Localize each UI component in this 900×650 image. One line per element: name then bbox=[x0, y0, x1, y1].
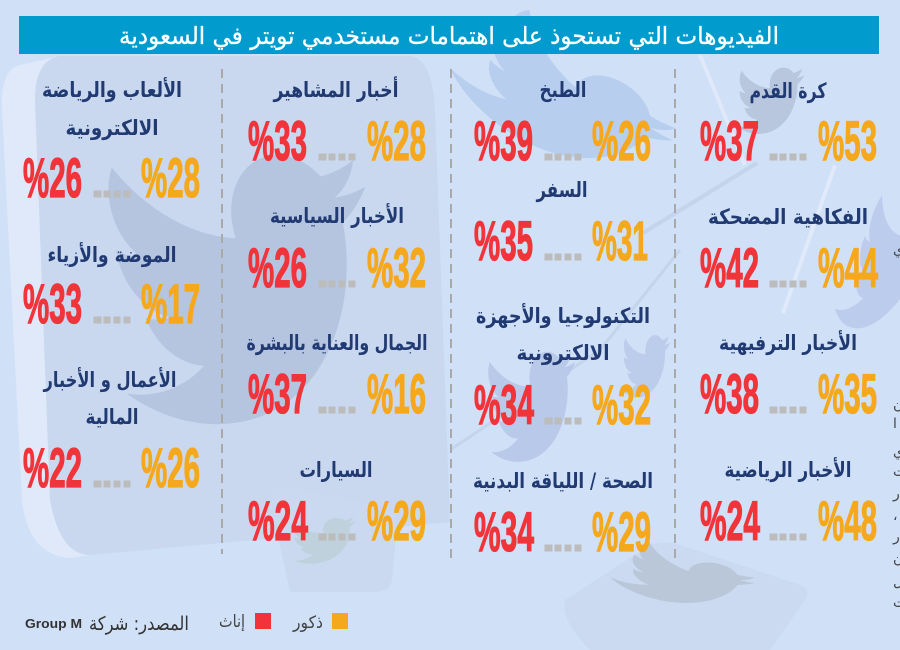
item: business and financial news: %26 bbox=[141, 436, 200, 499]
item: football bbox=[700, 79, 877, 172]
item: travel: %35 bbox=[474, 209, 533, 272]
item: fashion: %33 bbox=[23, 272, 82, 335]
item: business and financial news: الأعمال و الأخبار bbox=[43, 366, 176, 392]
item: cooking: %26 bbox=[592, 109, 651, 172]
title bar bbox=[19, 16, 879, 54]
item: celebrity news: أخبار المشاهير bbox=[273, 75, 398, 102]
item: health and fitness: %34 bbox=[474, 500, 534, 563]
item: games and esports: الألعاب والرياضة bbox=[42, 76, 182, 102]
item: cars: %24 bbox=[248, 489, 308, 552]
item: games and esports: الالكترونية bbox=[66, 116, 158, 140]
clipped neighbouring text at right edge: ر bbox=[892, 529, 900, 545]
item: beauty and skincare: %37 bbox=[248, 362, 307, 425]
item: business and financial news: المالية bbox=[86, 405, 138, 429]
item: cooking bbox=[474, 78, 651, 172]
item: cars: %29 bbox=[367, 489, 426, 552]
item: political news bbox=[248, 202, 426, 299]
item: comedy: %42 bbox=[700, 236, 759, 299]
item: games and esports: %26 bbox=[23, 146, 82, 209]
column dividers bbox=[222, 69, 675, 564]
item: celebrity news: %33 bbox=[248, 109, 307, 172]
item: comedy: الفكاهية المضحكة bbox=[708, 205, 868, 229]
item: political news: الأخبار السياسية bbox=[270, 202, 404, 228]
item: technology and electronics bbox=[474, 302, 651, 436]
item: sports news: الأخبار الرياضية bbox=[724, 456, 852, 482]
item: celebrity news: %28 bbox=[367, 109, 426, 172]
item: football: كرة القدم bbox=[750, 79, 827, 103]
source bbox=[25, 613, 189, 635]
item: fashion bbox=[23, 241, 200, 335]
item: travel bbox=[474, 178, 648, 272]
legend bbox=[219, 612, 348, 633]
item: technology and electronics: الالكترونية bbox=[516, 341, 610, 365]
item: fashion: الموضة والأزياء bbox=[48, 241, 176, 267]
item: health and fitness: %29 bbox=[592, 500, 651, 563]
item: cars: السيارات bbox=[300, 458, 372, 482]
item: political news: %32 bbox=[367, 236, 426, 299]
item: comedy bbox=[700, 205, 878, 299]
clipped neighbouring text at right edge: ا bbox=[893, 416, 897, 432]
source: المصدر: شركة bbox=[89, 613, 189, 635]
item: technology and electronics: التكنولوجيا والأجهزة bbox=[476, 302, 650, 328]
item: games and esports bbox=[23, 76, 200, 209]
item: beauty and skincare bbox=[246, 331, 428, 425]
item: cooking: الطبخ bbox=[540, 78, 586, 102]
item: entertainment news: %38 bbox=[700, 362, 759, 425]
item: fashion: %17 bbox=[141, 272, 200, 335]
legend: إناث bbox=[219, 612, 245, 632]
title bar: الفيديوهات التي تستحوذ على اهتمامات مستخدمي تويتر في السعودية bbox=[119, 22, 779, 50]
item: technology and electronics: %34 bbox=[474, 373, 534, 436]
item: technology and electronics: %32 bbox=[592, 373, 651, 436]
item: business and financial news bbox=[23, 366, 200, 499]
clipped neighbouring text at right edge bbox=[892, 242, 900, 611]
item: cars bbox=[248, 458, 426, 552]
item: football: %37 bbox=[700, 109, 759, 172]
text: %31 bbox=[592, 209, 648, 272]
item: cooking: %39 bbox=[474, 109, 533, 172]
item: entertainment news bbox=[700, 329, 877, 425]
item: health and fitness: الصحة / اللياقة البدنية bbox=[473, 469, 653, 493]
item: sports news bbox=[700, 456, 877, 552]
clipped neighbouring text at right edge: ر bbox=[892, 486, 900, 502]
source: Group M bbox=[25, 616, 82, 631]
item: political news: %26 bbox=[248, 236, 307, 299]
item: sports news: %24 bbox=[700, 489, 760, 552]
item: games and esports: %28 bbox=[141, 146, 200, 209]
item: beauty and skincare: الجمال والعناية بالبشرة bbox=[246, 331, 428, 355]
item: celebrity news bbox=[248, 75, 426, 172]
legend: ذكور bbox=[292, 613, 323, 633]
item: entertainment news: الأخبار الترفيهية bbox=[719, 329, 857, 355]
item: travel: السفر bbox=[536, 178, 588, 202]
clipped neighbouring text at right edge: ، bbox=[893, 508, 898, 524]
item: business and financial news: %22 bbox=[23, 436, 82, 499]
item: beauty and skincare: %16 bbox=[367, 362, 426, 425]
item: health and fitness bbox=[473, 469, 653, 563]
